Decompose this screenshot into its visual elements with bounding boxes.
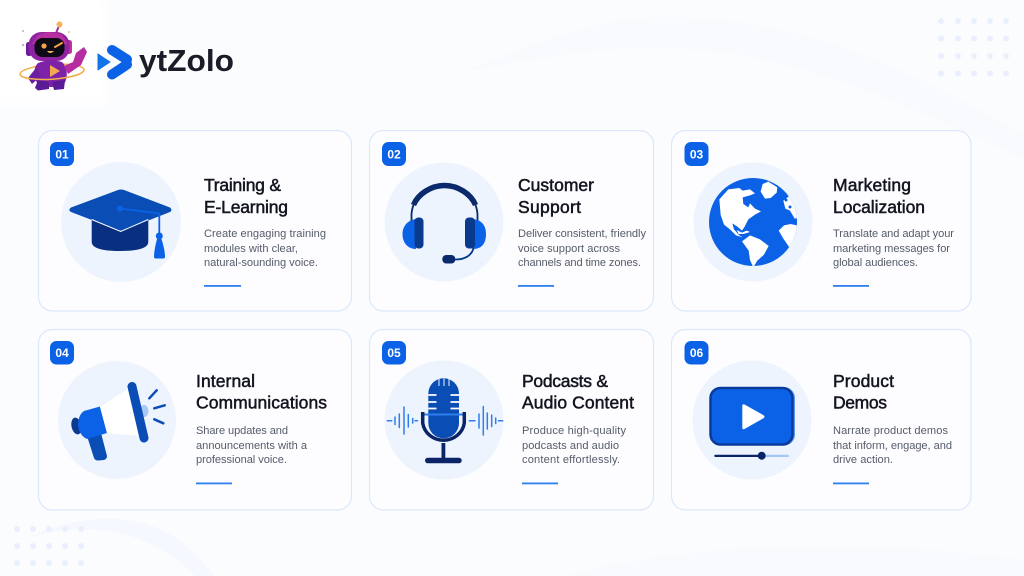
badge 06 bbox=[684, 341, 708, 364]
heading: Training & bbox=[204, 175, 281, 195]
heading bbox=[196, 371, 327, 412]
heading: Communications bbox=[196, 392, 327, 412]
description: marketing messages for bbox=[833, 243, 950, 255]
description bbox=[196, 425, 308, 466]
description: modules with clear, bbox=[204, 243, 298, 255]
description bbox=[518, 228, 646, 269]
heading: Product bbox=[833, 371, 894, 391]
badge 03: 03 bbox=[690, 148, 703, 162]
heading bbox=[518, 175, 594, 217]
description: Produce high-quality bbox=[522, 425, 626, 437]
badge 05 bbox=[382, 341, 406, 364]
icon: graduation cap bbox=[61, 162, 181, 282]
description: that inform, engage, and bbox=[833, 440, 952, 452]
description: global audiences. bbox=[833, 257, 918, 269]
heading bbox=[833, 175, 925, 217]
panel: Podcasts & Audio Content bbox=[370, 330, 654, 510]
heading: Customer bbox=[518, 175, 594, 195]
badge 04: 04 bbox=[55, 346, 69, 360]
description: Create engaging training bbox=[204, 228, 326, 240]
heading bbox=[204, 175, 288, 217]
description: voice support across bbox=[518, 243, 620, 255]
heading: Support bbox=[518, 197, 581, 217]
description: professional voice. bbox=[196, 454, 287, 466]
panel: Product Demos bbox=[672, 330, 971, 510]
logo: ytZolo brand mark bbox=[98, 50, 127, 74]
badge 06: 06 bbox=[690, 346, 703, 360]
heading: Podcasts & bbox=[522, 371, 608, 391]
description: announcements with a bbox=[196, 440, 308, 452]
badge 05: 05 bbox=[387, 346, 401, 360]
icon: microphone bbox=[384, 360, 504, 480]
description: podcasts and audio bbox=[522, 440, 619, 452]
description: Narrate product demos bbox=[833, 425, 948, 437]
icon: robot mascot bbox=[20, 22, 87, 90]
description: content effortlessly. bbox=[522, 454, 620, 466]
decorative dots: top right bbox=[938, 18, 1009, 76]
description bbox=[833, 228, 954, 269]
icon: megaphone bbox=[58, 361, 176, 479]
description bbox=[204, 228, 326, 269]
badge 01: 01 bbox=[55, 148, 69, 162]
heading: Internal bbox=[196, 371, 255, 391]
badge 03 bbox=[684, 142, 708, 166]
heading: Localization bbox=[833, 197, 925, 217]
heading: Audio Content bbox=[522, 392, 634, 412]
icon: globe bbox=[694, 162, 812, 282]
decorative dots: bottom left bbox=[14, 526, 84, 566]
panel: Training & E-Learning bbox=[38, 130, 352, 311]
description: drive action. bbox=[833, 454, 893, 466]
logo text: ytZolo bbox=[139, 43, 234, 78]
description: channels and time zones. bbox=[518, 257, 641, 269]
badge 04 bbox=[50, 341, 74, 364]
heading bbox=[833, 371, 894, 412]
icon: headset bbox=[384, 162, 504, 282]
badge 02 bbox=[382, 142, 406, 166]
panel: Customer Support bbox=[370, 130, 654, 311]
description: Translate and adapt your bbox=[833, 228, 954, 240]
panel: Marketing Localization bbox=[672, 130, 971, 311]
icon: video player bbox=[692, 360, 812, 480]
heading: Marketing bbox=[833, 175, 911, 195]
badge 02: 02 bbox=[387, 148, 401, 162]
description: natural-sounding voice. bbox=[204, 257, 318, 269]
description bbox=[833, 425, 952, 466]
panel: Internal Communications bbox=[38, 330, 352, 510]
heading bbox=[522, 371, 634, 412]
heading: E-Learning bbox=[204, 197, 288, 217]
description bbox=[522, 425, 626, 466]
badge 01 bbox=[50, 142, 74, 166]
description: Deliver consistent, friendly bbox=[518, 228, 646, 240]
description: Share updates and bbox=[196, 425, 288, 437]
heading: Demos bbox=[833, 392, 887, 412]
